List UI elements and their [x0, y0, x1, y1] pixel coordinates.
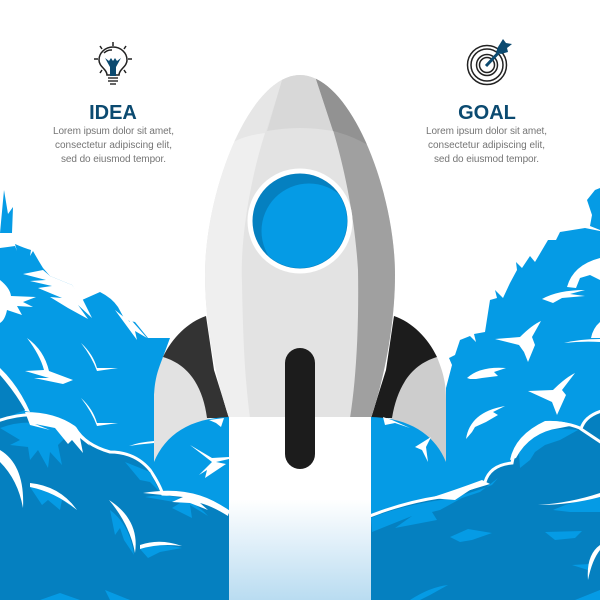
exhaust flame	[229, 417, 371, 600]
rocket body	[200, 70, 400, 420]
icon: light bulb	[94, 42, 132, 84]
text: idea: Lorem ipsum dolor sit amet,	[53, 126, 174, 137]
centre pill	[285, 348, 315, 469]
heading: goal: GOAL	[458, 102, 516, 124]
left cloud bottom tufts	[40, 590, 130, 600]
left cloud blue tufts	[0, 423, 208, 558]
light blue cloud: right	[371, 188, 600, 600]
cloud highlights: left	[0, 270, 154, 446]
left fin	[154, 316, 229, 465]
icon: target	[468, 39, 512, 84]
heading: idea: IDEA	[89, 102, 137, 124]
text: goal	[426, 126, 547, 165]
text: idea: sed do eiusmod tempor.	[61, 154, 166, 165]
lower cloud highlights	[190, 417, 431, 478]
porthole	[248, 168, 356, 278]
text: goal: sed do eiusmod tempor.	[434, 154, 539, 165]
right fin	[371, 316, 446, 465]
block: goal	[426, 39, 547, 165]
right cloud blue tufts	[371, 429, 600, 600]
right cloud rim highlight	[430, 421, 600, 580]
block: idea	[53, 42, 174, 165]
rocket	[154, 70, 446, 465]
text: goal: consectetur adipiscing elit,	[428, 140, 545, 151]
text: idea: consectetur adipiscing elit,	[55, 140, 172, 151]
text: idea	[53, 126, 174, 165]
light blue cloud: left	[0, 190, 170, 600]
dark blue cloud: right	[360, 410, 600, 600]
left cloud rim highlight	[0, 412, 229, 553]
text: goal: Lorem ipsum dolor sit amet,	[426, 126, 547, 137]
dark blue cloud: left	[0, 375, 240, 600]
cloud highlights: right	[415, 258, 600, 462]
lower cloud over fins	[154, 417, 446, 600]
